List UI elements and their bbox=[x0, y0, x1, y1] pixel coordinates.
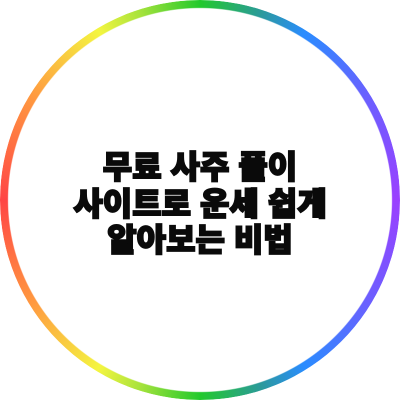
title bbox=[72, 149, 327, 258]
title: 무료 사주 풀이 bbox=[103, 149, 297, 185]
title: 사이트로 운세 쉽게 bbox=[73, 186, 327, 222]
title: 알아보는 비법 bbox=[107, 222, 293, 258]
